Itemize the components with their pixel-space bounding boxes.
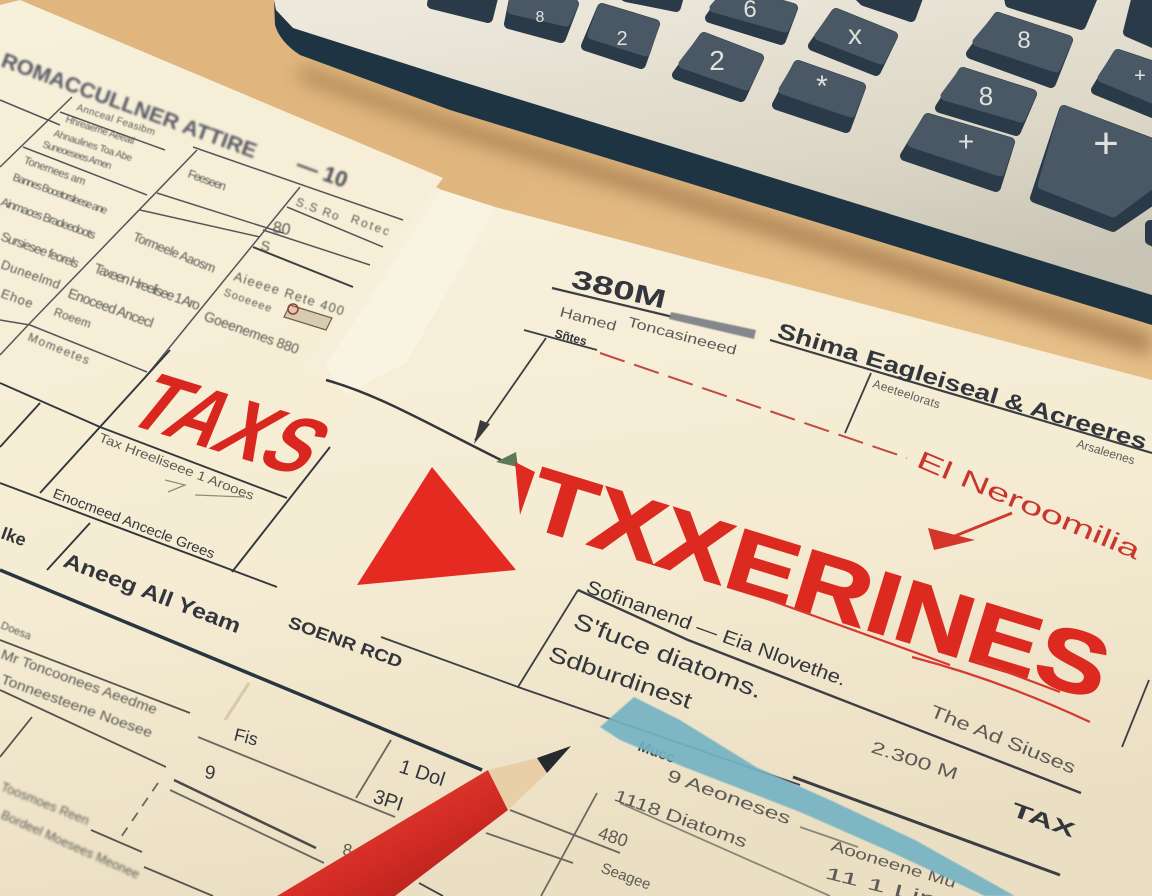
red triangle (357, 467, 516, 585)
left sheet form text: Suneoesees Amen (41, 139, 113, 172)
left sheet form text: Rotec (349, 212, 391, 238)
left sheet blurred title (0, 49, 351, 193)
pencil (277, 746, 571, 896)
main sheet form text: Tonneesteene Noesee (0, 671, 155, 741)
left sheet form text: Hhreaeme Aeeatl (64, 114, 136, 147)
main sheet form text: Sñtes (553, 326, 589, 348)
red handwritten note: El Neroomilia (913, 446, 1145, 565)
red heading: TAXS: TAXS (110, 358, 350, 491)
main sheet form text: S'fuce diatoms. (570, 607, 766, 703)
left sheet lower text: Enocmeed Ancecle Grees (51, 485, 217, 561)
left sheet blurred title: ROMACCULLNER ATTIRE (0, 49, 260, 163)
main sheet form text: 9 Aeoneses (665, 766, 793, 828)
key glyphs: x (848, 19, 862, 50)
grey bar (669, 312, 756, 339)
main sheet form text: 1118 Diatoms (612, 786, 750, 852)
key glyphs: 2 (709, 45, 725, 76)
tan scratch (225, 683, 249, 720)
main sheet form text: 2.300 M (869, 738, 960, 784)
calculator keys (432, 0, 1152, 245)
main sheet form text: Sofinanend — Eia Nlovethe. (583, 577, 849, 691)
calculator (274, 0, 1152, 325)
left sheet form text: Tormeele Aaosm (131, 229, 218, 276)
main sheet form text: Aeeteelorats (871, 377, 942, 411)
red dashed line (600, 353, 907, 458)
left sheet form text: Momeetes (26, 330, 91, 367)
left sheet form text: Duneelmd (0, 257, 62, 292)
key glyphs: 8 (1017, 27, 1031, 54)
main sheet form text: 9 (203, 762, 217, 784)
main sheet form text: Arsaleenes (1075, 436, 1137, 467)
left sheet form text: 80 (271, 219, 292, 239)
main sheet form text: 380M (569, 264, 669, 314)
left sheet lower text: Tax Hreeliseee 1 Arooes (97, 430, 257, 503)
main red heading: TXXERINES: TXXERINES (518, 448, 1121, 719)
form rules (0, 288, 1152, 896)
left sheet lower text (0, 430, 257, 638)
left sheet form text: Ehoe (0, 286, 35, 311)
tax form: main sheet (0, 180, 1152, 896)
left sheet form text: Aieeee Rete 400 (232, 269, 346, 318)
main sheet form text: 3PI (370, 786, 406, 816)
key glyphs: + (1134, 65, 1146, 87)
main sheet form text (0, 264, 1150, 896)
main sheet form text: 1 Dol (396, 756, 448, 791)
wooden desk (0, 0, 1152, 440)
left sheet rules (0, 97, 403, 587)
left sheet blurred title: — 10 (293, 151, 351, 193)
blue paint stroke (600, 697, 1015, 896)
key glyphs: + (1093, 119, 1119, 168)
left sheet form text: Roeem (52, 305, 93, 331)
left sheet form text: S (259, 237, 271, 255)
main sheet form text: Toosmoes Reen (0, 779, 92, 828)
main sheet form text: TAX (1008, 799, 1079, 843)
left sheet form text: Goeenemes 880 (202, 308, 302, 357)
red underline strokes (770, 600, 1090, 722)
main sheet form text: Bordeel Moesees Meonee (0, 807, 142, 882)
main sheet form text: Shima Eagleiseal & Acreeres (775, 318, 1150, 454)
left sheet lower text: Aneeg All Yeam (60, 549, 244, 638)
main sheet form text: 8 (341, 840, 353, 860)
main sheet form text: Toncasineeed (626, 313, 739, 358)
main sheet form text: Fis (232, 724, 260, 750)
left sheet form text: Feeseen (186, 167, 228, 193)
left sheet form text: Sooeeee (222, 287, 273, 315)
key glyphs: + (958, 126, 974, 157)
left sheet form text: Ahnaulines Toa Abe (52, 128, 134, 164)
main sheet form text: Mucc (636, 738, 677, 767)
main sheet form text: Aooneene Mu (829, 838, 958, 892)
tax form: left sheet (0, 0, 443, 638)
key glyphs: 8 (979, 81, 993, 111)
main sheet form text: Sdburdinest (545, 641, 695, 714)
left sheet form text: S.S Ro (294, 195, 341, 223)
red arrow (928, 513, 1012, 550)
main sheet form text: SOENR RCD (286, 613, 405, 672)
calculator shadow on desk (300, 66, 1152, 358)
main sheet form text: Mr Toncoonees Aeedme (0, 646, 160, 717)
left sheet form text: Enoceed Ancecl (66, 285, 156, 331)
key glyphs (536, 0, 1146, 168)
left sheet form text: Taxeen Hreelisee 1 Aro (92, 260, 203, 313)
main sheet form text: The Ad Siuses (928, 701, 1079, 778)
key glyphs: * (816, 70, 828, 103)
left sheet form text: Tonernees am (22, 155, 87, 188)
main sheet form text: 480 (596, 823, 631, 851)
small sketch icon (284, 304, 332, 330)
left sheet form text: Bannes Bocetorsleese ane (11, 172, 109, 217)
main sheet form text: Hamed (558, 303, 618, 334)
key glyphs: 2 (616, 28, 628, 50)
connector arrow (326, 380, 518, 467)
left sheet form text: Sursiesee feorels (0, 229, 82, 271)
left sheet form text: Annceal Feasibm (75, 102, 156, 138)
left sheet form text (0, 102, 391, 367)
left sheet form text: Ainmaces Bradeedoots (0, 195, 98, 242)
main sheet form text: Seagee (599, 860, 653, 893)
key glyphs: 8 (536, 9, 545, 26)
